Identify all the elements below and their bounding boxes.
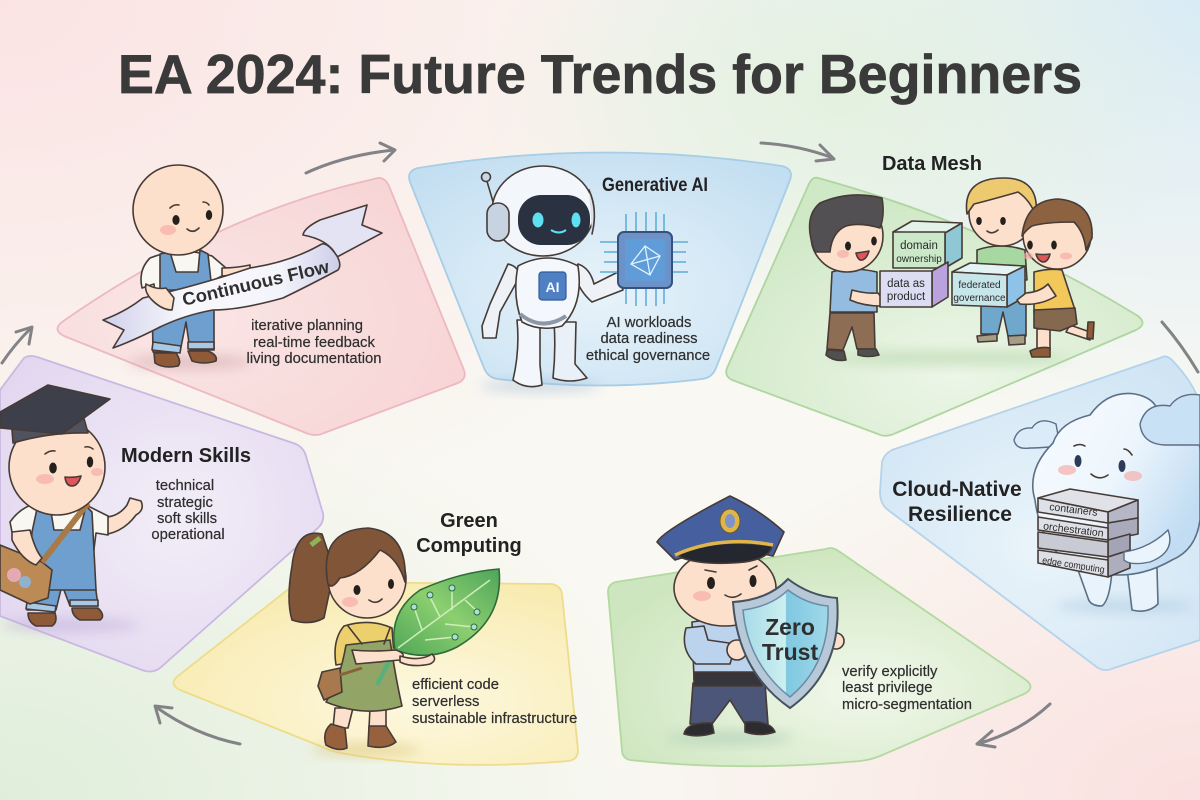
text: generative ai points: ethical governance [586, 348, 710, 364]
text: modern skills points: strategic [157, 495, 214, 511]
text: continuous flow points: real-time feedback [253, 335, 375, 351]
torso [692, 618, 765, 680]
banner tail [303, 205, 382, 257]
box: domain ownership [893, 221, 962, 268]
text: generative ai points: data readiness [600, 331, 698, 347]
head [9, 419, 105, 515]
text: zero trust points [842, 664, 972, 713]
arrow: to cloud [1162, 322, 1198, 372]
panel: modern skills [0, 356, 323, 672]
text: green computing points: efficient code [412, 677, 499, 693]
box: federated governance [952, 263, 1025, 307]
text: green computing points: sustainable infrastructure [412, 711, 577, 727]
heading: green computing [416, 510, 522, 557]
chest chip [539, 272, 566, 300]
heading: modern skills: Modern Skills [121, 445, 251, 467]
arrow: to green computing [155, 706, 240, 744]
box: data as product [880, 262, 948, 307]
server stack: containers [1049, 501, 1098, 519]
arrow: to data mesh [761, 143, 834, 161]
panel: generative ai [409, 152, 791, 386]
arm [1124, 530, 1170, 564]
text: green computing points: serverless [412, 694, 479, 710]
arm [352, 650, 403, 664]
panel: data mesh [726, 178, 1143, 436]
dress [326, 640, 402, 711]
text: modern skills points: operational [151, 527, 225, 543]
box: domain ownership: domain [900, 240, 938, 252]
panel: zero trust [608, 548, 1031, 766]
right child [1017, 199, 1094, 357]
box: federated governance: federated [958, 280, 1001, 291]
text: continuous flow points: iterative planning [251, 318, 363, 334]
character: graduate [0, 385, 142, 632]
legs [27, 560, 98, 610]
panel: continuous flow [57, 178, 465, 435]
character: zero trust police officer: Trust [762, 639, 818, 665]
ponytail [289, 533, 334, 623]
heading: cloud-native resilience [892, 478, 1022, 526]
head [328, 540, 406, 618]
banner [103, 244, 340, 348]
character: zero trust police officer [657, 496, 844, 744]
box: data as product: data as [887, 278, 925, 290]
blond child [966, 178, 1036, 345]
title: EA 2024: Future Trends for Beginners [118, 43, 1082, 105]
heading: data mesh: Data Mesh [882, 153, 982, 175]
box: federated governance: governance [953, 293, 1006, 304]
text: green computing points [412, 677, 577, 727]
heading: generative ai: Generative AI [602, 175, 708, 196]
small cloud [1014, 421, 1060, 448]
box: data as product: product [887, 291, 926, 303]
text: modern skills points: soft skills [157, 511, 217, 527]
near arm [146, 284, 174, 310]
legs [1078, 568, 1158, 611]
hand [727, 640, 747, 660]
text: zero trust points: least privilege [842, 680, 932, 696]
bag [0, 545, 52, 604]
character: girl with leaf [289, 528, 420, 756]
top-right cloud [1140, 394, 1200, 445]
server stack [1038, 489, 1138, 577]
torso [10, 502, 110, 565]
text: generative ai points [586, 315, 710, 364]
text: modern skills points [151, 478, 225, 543]
icon: ai chip [600, 212, 688, 306]
head [133, 165, 223, 255]
text: zero trust points: micro-segmentation [842, 697, 972, 713]
body [1033, 393, 1200, 575]
server stack: edge computing [1041, 555, 1105, 576]
banner label: Continuous Flow [180, 256, 332, 310]
box: domain ownership: ownership [896, 254, 942, 265]
legs [513, 320, 542, 387]
text: continuous flow points: living documentation [247, 351, 381, 367]
shield label: Zero [765, 614, 815, 640]
bag [318, 668, 342, 700]
torso [516, 258, 579, 328]
text: continuous flow points [247, 318, 381, 367]
character: continuous flow child with banner [103, 165, 382, 369]
cap [657, 496, 784, 560]
arrow: to zero trust [977, 704, 1050, 747]
near arm [12, 530, 42, 565]
icon: circuit leaf [352, 569, 499, 683]
shield [733, 579, 838, 708]
graduation cap [12, 404, 88, 443]
shirt [335, 622, 394, 665]
heading: green computing: Computing [416, 535, 522, 557]
head [674, 550, 776, 626]
raised arm [108, 498, 142, 534]
arrow: to generative ai [306, 143, 395, 173]
legs [690, 683, 768, 724]
panel: cloud-native resilience [880, 356, 1200, 670]
server stack: orchestration [1043, 520, 1104, 540]
chest chip: AI [546, 279, 560, 295]
panel: green computing [173, 582, 578, 765]
heading: green computing: Green [440, 510, 498, 532]
character: cloud with server stack [1014, 393, 1200, 613]
head [492, 166, 594, 256]
arms [482, 264, 520, 338]
heading: cloud-native resilience: Resilience [908, 503, 1012, 526]
left child [810, 195, 885, 360]
text: generative ai points: AI workloads [607, 315, 691, 331]
visor [518, 195, 590, 245]
heading: cloud-native resilience: Cloud-Native [892, 478, 1022, 501]
text: zero trust points: verify explicitly [842, 664, 938, 680]
arrow: to modern skills [2, 327, 32, 363]
characters: data mesh children with boxes [810, 178, 1094, 365]
text: modern skills points: technical [156, 478, 214, 494]
character: robot [480, 166, 623, 392]
